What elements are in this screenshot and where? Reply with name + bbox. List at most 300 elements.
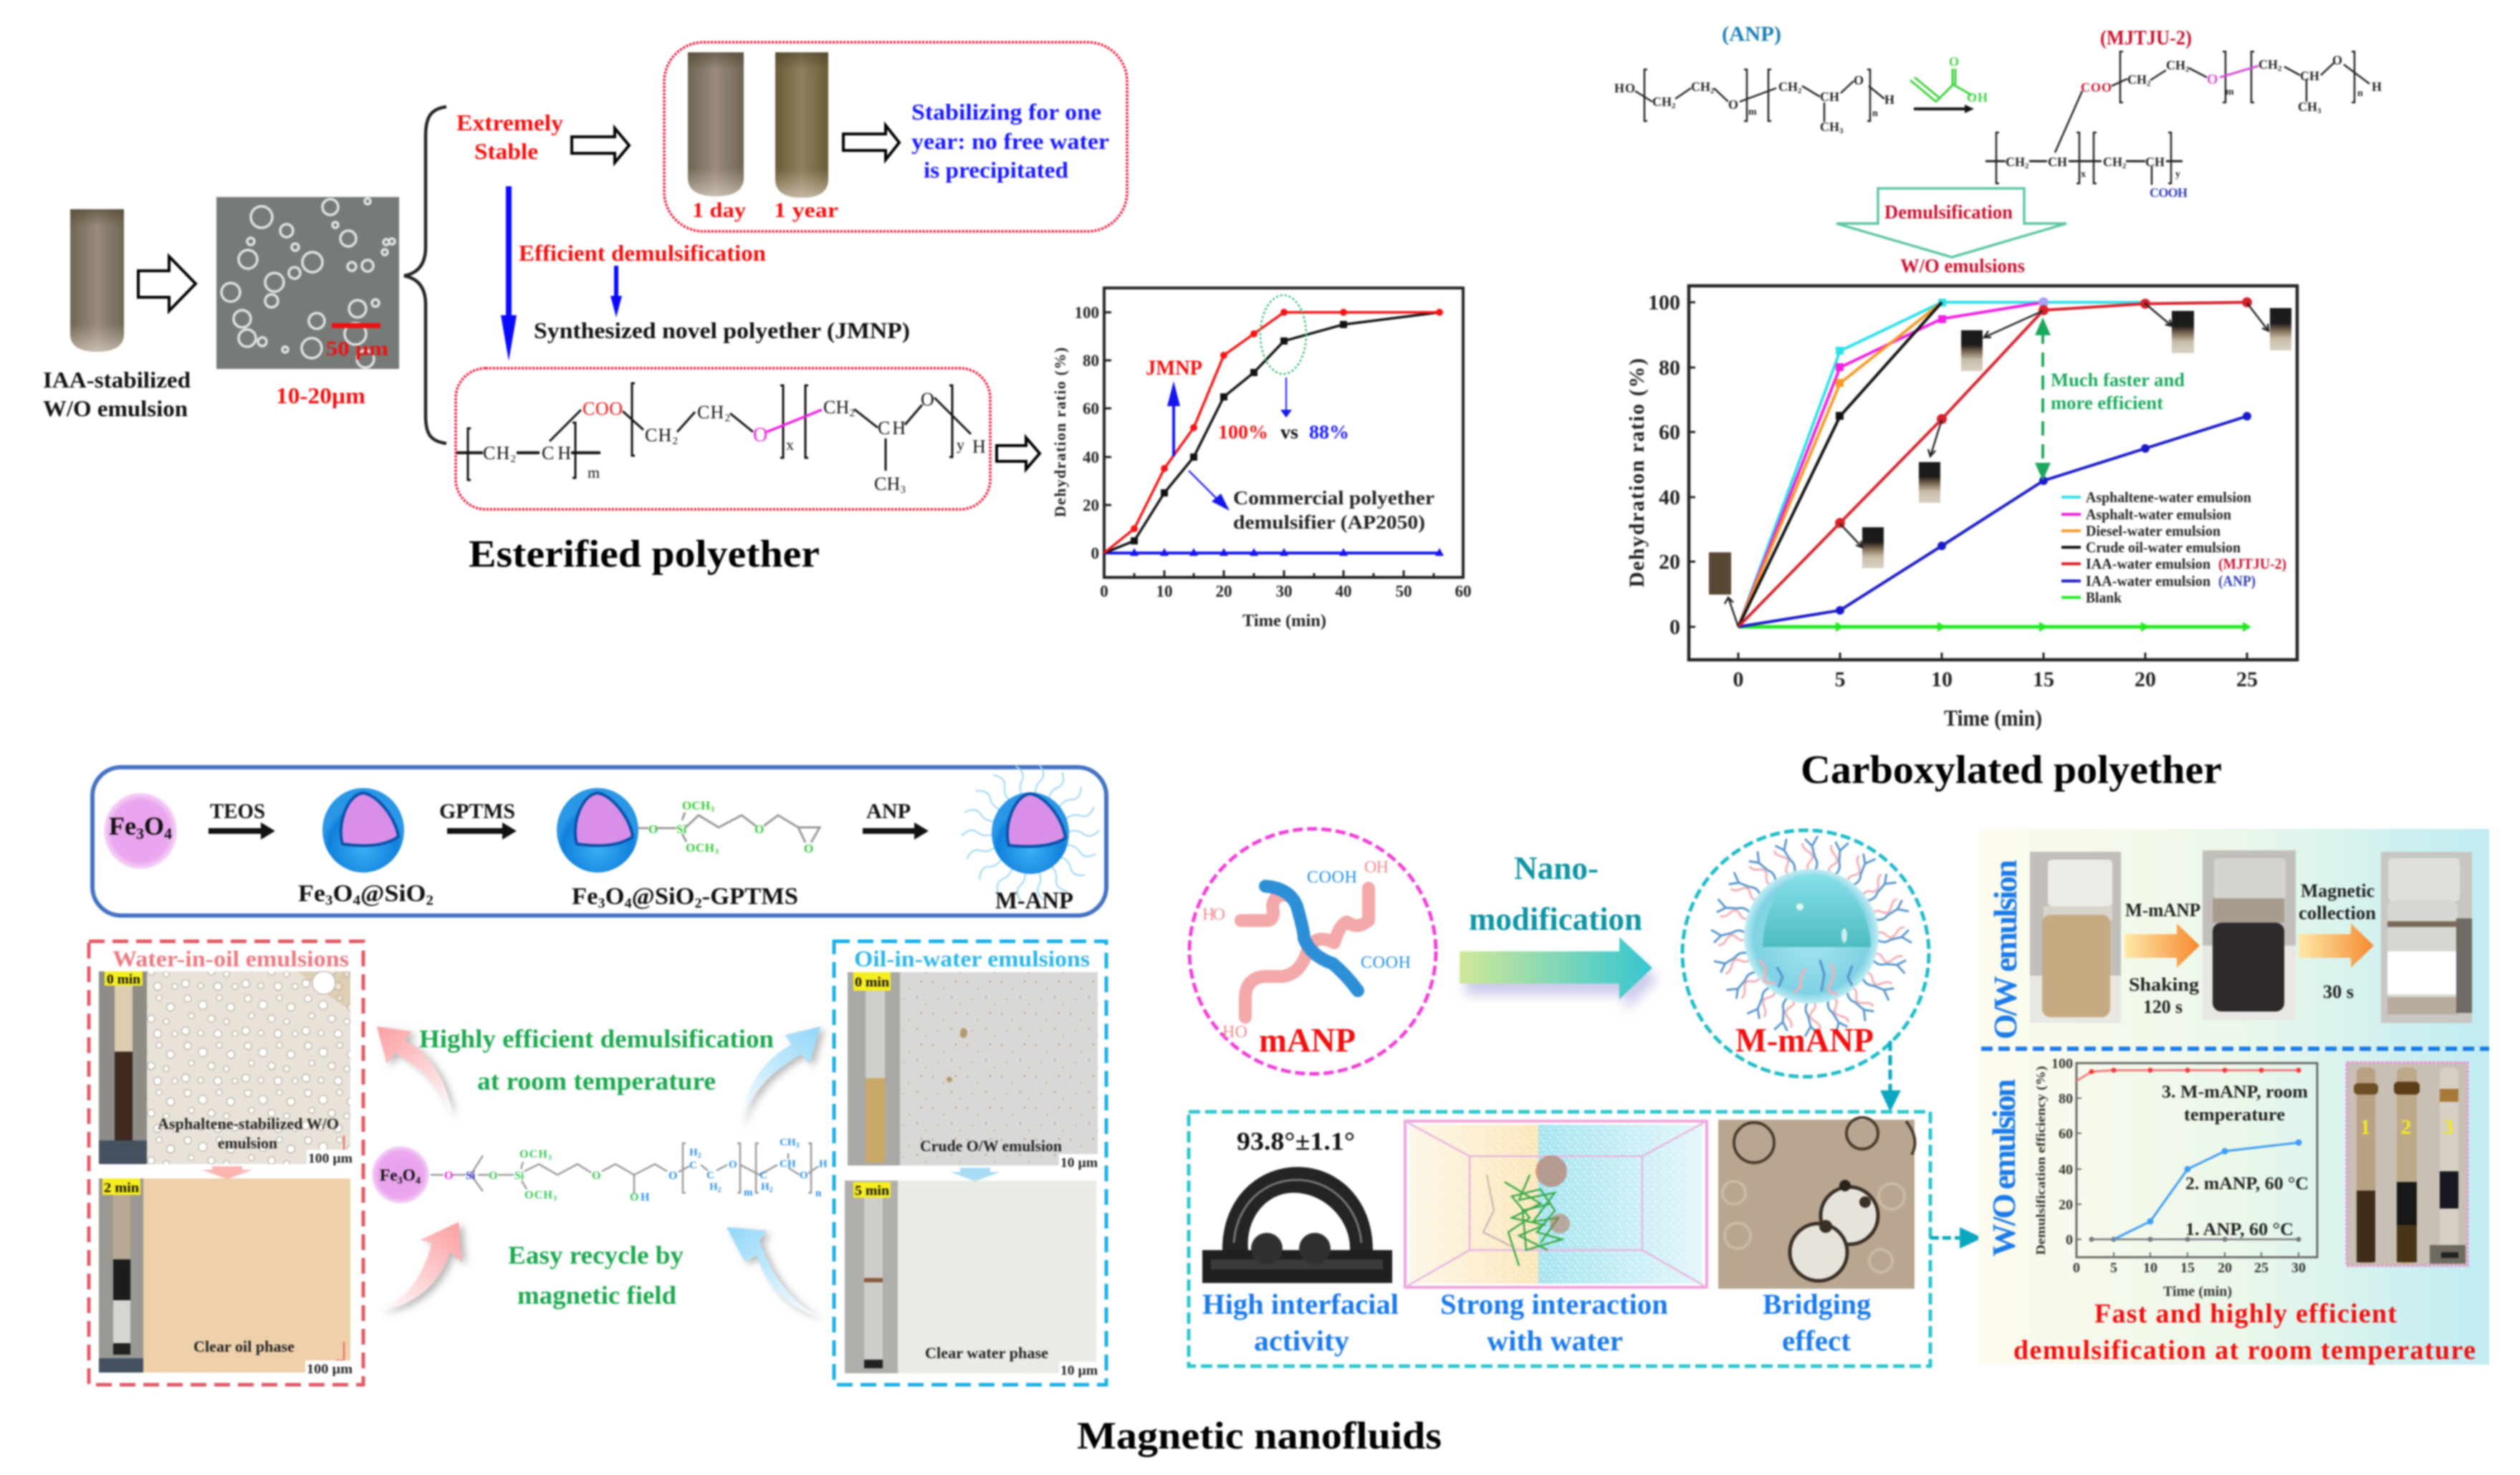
y axis numbers: 40 [1659, 486, 1680, 509]
x axis numbers: 20 [2218, 1260, 2232, 1276]
labels: functional groups: COOH [1361, 953, 1411, 972]
arrow: GPTMS [439, 799, 517, 840]
panel: mANP [1189, 829, 1436, 1074]
heading: carboxylated polyether: Carboxylated polyether [1801, 748, 2222, 792]
label: asphaltene emulsion: Asphaltene-stabilized W/O [158, 1115, 339, 1133]
label: shaking [2129, 974, 2199, 1017]
particle: Fe3O4@SiO2-GPTMS: O [648, 822, 658, 836]
divider: dashed blue [1981, 1047, 2489, 1051]
structure: grafted chain: H [819, 1158, 828, 1170]
structure: grafted chain: O [630, 1191, 638, 1203]
y axis numbers: 80 [1659, 356, 1680, 380]
arrow: to JMNP [1167, 381, 1180, 456]
series: ANP [2089, 1236, 2301, 1242]
label: clear oil phase: Clear oil phase [193, 1337, 294, 1355]
photo: three tubes [2347, 1062, 2468, 1266]
swoosh: pink lower [377, 1222, 462, 1310]
x axis numbers [1100, 582, 1472, 600]
heading: water-in-oil: Water-in-oil emulsions [112, 946, 349, 971]
label: JMNP: JMNP [1146, 356, 1202, 380]
structure: ANP: 2 [1710, 87, 1715, 95]
structure: ANP: m [1748, 107, 1757, 117]
structure: grafted chain: C [689, 1160, 697, 1171]
label: efficient demulsification: Efficient demulsification [519, 240, 766, 266]
structure: grafted chain: Si [466, 1170, 476, 1182]
panel: JMNP structure: x [786, 436, 794, 453]
label: Fe3O4@SiO2-GPTMS: -GPTMS [702, 883, 798, 910]
photo: dark vial [2203, 850, 2296, 1020]
label: 30 s: 30 s [2323, 981, 2354, 1002]
y axis numbers: 20 [1659, 550, 1680, 574]
y axis numbers: 0 [1091, 544, 1099, 562]
panel: stability photos [664, 42, 1127, 231]
y axis numbers: 0 [2066, 1232, 2073, 1248]
y axis numbers: 60 [1083, 400, 1099, 418]
label: Fe3O4@SiO2: 3 [325, 893, 332, 908]
label: crude O/W: Crude O/W emulsion [920, 1137, 1062, 1155]
photo: W/O tube 2 min: 2 min [104, 1181, 139, 1196]
label: magnetic collection: Magnetic [2301, 880, 2375, 901]
photo: IAA emulsion tube [70, 209, 124, 352]
arrow: demulsification [1836, 188, 2066, 257]
x axis numbers: 20 [1215, 582, 1232, 600]
text: highly efficient: at room temperature [477, 1067, 716, 1095]
y axis numbers: 100 [1648, 291, 1680, 314]
photo: 1 year tube [775, 52, 828, 198]
x axis numbers: 30 [2291, 1260, 2306, 1276]
label: Fe3O4@SiO2: 4 [353, 893, 360, 908]
structure: MJTJU-2: CH [2006, 155, 2025, 169]
structure: MJTJU-2: m [2226, 87, 2234, 97]
conclusion: fast and efficient: Fast and highly efficient [2094, 1299, 2397, 1329]
x axis numbers [1733, 668, 2258, 691]
arrow: particle to properties [1880, 1041, 1901, 1112]
panel: JMNP structure: m [588, 463, 600, 481]
label: M-mANP step: M-mANP [2125, 900, 2200, 921]
structure: MJTJU-2: CH [2300, 69, 2319, 83]
series labels: 1. ANP, 60 °C [2185, 1220, 2294, 1239]
chains around particle [1711, 836, 1912, 1037]
series: orange diesel [1738, 302, 1942, 627]
y axis numbers: 100 [1075, 304, 1099, 322]
panel: performance [1978, 829, 2489, 1365]
structure: acrylic acid: O [1949, 54, 1959, 69]
structure: grafted chain [431, 1137, 828, 1203]
labels: 1 day and 1 year [692, 198, 838, 222]
structure: grafted chain: O [592, 1170, 600, 1182]
arrow: faster comparison [2035, 317, 2051, 481]
label: bridging effect: Bridging [1763, 1288, 1871, 1320]
structure: grafted chain: C [706, 1170, 714, 1181]
structure: grafted chain: OCH [519, 1148, 547, 1161]
conclusion: fast and efficient: demulsification at room temperature [2013, 1335, 2476, 1365]
particle: M-ANP [962, 765, 1099, 901]
label: Fe3O4@SiO2: @SiO [360, 880, 426, 907]
panel: central mechanism [372, 1024, 828, 1317]
structure: ANP: CH [1652, 95, 1672, 109]
photo: W/O tube 0 min: 0 min [107, 972, 140, 987]
labels: functional groups [1202, 858, 1411, 1042]
y axis numbers [2051, 1056, 2073, 1248]
structure: grafted chain: O [800, 1170, 808, 1181]
structure: ANP: n [1872, 108, 1878, 119]
legend: (ANP) [2218, 572, 2256, 590]
particle: Fe3O4: 3 [136, 825, 144, 842]
x axis numbers: 50 [1396, 582, 1412, 600]
label: strong interaction [1440, 1288, 1668, 1357]
label: extremely stable [456, 110, 563, 164]
label: asphaltene emulsion: emulsion [218, 1134, 277, 1152]
label: IAA-stabilized W/O emulsion: W/O emulsion [43, 395, 188, 421]
micrograph: emulsion droplets: 50 µm [326, 338, 388, 360]
arrow: photos to note [843, 125, 899, 160]
note: much faster [2051, 370, 2185, 413]
scale: 100 um top: 100 µm [308, 1151, 353, 1166]
x axis title: Time (min) [2163, 1284, 2232, 1299]
y axis numbers [1075, 304, 1099, 562]
note: one-year stability: year: no free water [911, 128, 1109, 154]
chart: JMNP dehydration ratio [1051, 288, 1472, 630]
panel: JMNP structure: CH [542, 443, 571, 463]
y axis numbers [1648, 291, 1680, 639]
label: M-ANP: M-ANP [995, 888, 1073, 914]
photo: O/W tube 0 min: 0 min [855, 975, 889, 990]
panel: JMNP structure: y [957, 436, 964, 453]
x axis numbers: 10 [1931, 668, 1953, 691]
text: highly efficient: Highly efficient demulsification [419, 1024, 774, 1053]
particle: Fe3O4@SiO2-GPTMS: 3 [711, 805, 715, 814]
particle: teal sphere [1744, 869, 1879, 1004]
structure: ANP [1614, 69, 1894, 135]
x axis numbers: 15 [2180, 1260, 2195, 1276]
structure: MJTJU-2: H [2372, 80, 2382, 94]
label: Fe3O4@SiO2-GPTMS: 4 [624, 895, 632, 911]
structure: grafted chain: O [489, 1170, 497, 1182]
chain: pink polymer [1241, 888, 1369, 1017]
x axis numbers: 0 [1733, 668, 1744, 691]
particle: Fe3O4: 4 [164, 825, 172, 842]
structure: ANP: 3 [1839, 127, 1844, 135]
series: M-mANP [2076, 1067, 2301, 1081]
legend: Asphalt-water emulsion [2086, 506, 2231, 523]
label: O/W emulsion: O/W emulsion [1987, 860, 2023, 1039]
label: bridging effect: effect [1782, 1325, 1851, 1357]
label: commercial demulsifier: Commercial polyether [1233, 487, 1434, 509]
label: nano-modification: Nano- [1514, 850, 1599, 886]
x axis numbers: 5 [1834, 668, 1846, 691]
photo: three tubes: 3 [2443, 1115, 2453, 1139]
y axis numbers: 20 [1083, 496, 1099, 514]
label: MJTJU-2: (MJTJU-2) [2100, 27, 2192, 49]
photo: O/W tube 5 min [845, 1181, 898, 1373]
panel: JMNP structure: CH [878, 418, 906, 438]
chain: blue polymer [1265, 886, 1358, 991]
labels: functional groups: HO [1222, 1023, 1247, 1042]
structure: MJTJU-2: O [2332, 53, 2342, 67]
swoosh: blue upper [740, 1027, 820, 1128]
panel: JMNP structure: 2 [510, 453, 516, 465]
structure: ANP: HO [1614, 81, 1635, 95]
inset pointers [1725, 303, 2269, 627]
x axis numbers: 25 [2236, 668, 2258, 691]
structure: grafted chain: CH [780, 1137, 795, 1148]
particle: Fe3O4@SiO2-GPTMS: O [754, 822, 764, 836]
panel: JMNP structure: O [921, 389, 934, 410]
structure: MJTJU-2: 2 [2122, 162, 2127, 170]
chart: MJTJU-2 dehydration ratio [1625, 286, 2297, 731]
value: contact angle: 93.8°±1.1° [1237, 1127, 1355, 1156]
structure: MJTJU-2: CH [2048, 155, 2067, 169]
particle: Fe3O4: Fe [109, 812, 136, 840]
legend: Crude oil-water emulsion [2086, 539, 2241, 556]
panel: JMNP structure [456, 368, 990, 509]
structure: grafted chain: Si [514, 1170, 524, 1182]
x axis numbers: 30 [1275, 582, 1293, 600]
label: W/O emulsions: W/O emulsions [1900, 255, 2025, 277]
structure: MJTJU-2: CH [2103, 155, 2122, 169]
structure: grafted chain: H [689, 1147, 698, 1158]
panel: M-mANP [1682, 830, 1929, 1077]
text: highly efficient [419, 1024, 774, 1095]
label: nano-modification: modification [1469, 900, 1642, 937]
y axis numbers: 40 [2059, 1162, 2073, 1178]
panel: JMNP structure: CH [645, 425, 671, 446]
photo: three tubes: 1 [2360, 1115, 2370, 1139]
arrow: blue down [950, 1168, 1000, 1181]
label: extremely stable: Extremely [456, 110, 563, 135]
y axis numbers: 60 [2059, 1126, 2073, 1142]
arrow: step one [2124, 923, 2200, 968]
arrow: nano modification [1460, 937, 1652, 999]
structure: grafted chain: H [641, 1191, 650, 1203]
comparison text: 88% [1309, 421, 1349, 443]
photo: three tubes: 2 [2400, 1115, 2412, 1139]
series: JMNP [1104, 309, 1443, 553]
label: mANP: mANP [1259, 1022, 1356, 1060]
arrow: TEOS: TEOS [210, 799, 265, 823]
label: bridging effect [1763, 1288, 1871, 1357]
structure: ANP: H [1884, 92, 1894, 107]
x axis numbers: 10 [2143, 1260, 2157, 1276]
structure: MJTJU-2: 2 [2278, 64, 2282, 73]
y axis numbers: 100 [2051, 1056, 2073, 1072]
panel: JMNP structure: CH [874, 474, 900, 494]
photo: O/W tube 0 min [848, 972, 900, 1166]
arrow: GPTMS: GPTMS [439, 799, 515, 823]
heading: magnetic nanofluids: Magnetic nanofluids [1077, 1414, 1442, 1457]
scale: 10 um top: 10 µm [1060, 1156, 1098, 1171]
structure: MJTJU-2: x [2081, 169, 2086, 180]
structure: MJTJU-2: CH [2145, 155, 2165, 169]
scale: 100 um bottom [305, 1342, 354, 1377]
y axis numbers: 40 [1083, 448, 1099, 466]
x axis numbers: 25 [2254, 1260, 2269, 1276]
scale: 100 um bottom: 100 µm [307, 1362, 353, 1377]
particle: Fe3O4@SiO2-GPTMS: Si [676, 822, 686, 836]
particle: modified Fe3O4: Fe [380, 1166, 397, 1184]
comparison text: vs [1280, 421, 1298, 443]
y axis numbers: 80 [1083, 352, 1099, 370]
labels: 1 day and 1 year: 1 day [692, 198, 746, 222]
chart: demulsification efficiency [2033, 1056, 2317, 1299]
particle: Fe3O4@SiO2-GPTMS: 3 [715, 847, 719, 856]
structure: acrylic acid [1910, 54, 1988, 105]
label: nano-modification [1469, 850, 1642, 937]
x axis numbers: 5 [2110, 1260, 2117, 1276]
panel: JMNP structure: 3 [900, 484, 906, 496]
series labels: temperature [2184, 1105, 2285, 1125]
label: synthesized polyether: Synthesized novel polyether (JMNP) [534, 317, 910, 343]
label: Fe3O4@SiO2: Fe [298, 880, 324, 907]
structure: MJTJU-2: CH [2298, 100, 2317, 114]
y axis title: Demulsification efficiency (%) [2033, 1066, 2049, 1255]
panel: JMNP structure: H [972, 436, 986, 457]
y axis numbers: 0 [1669, 615, 1680, 639]
panel: esterified polyether [43, 42, 1127, 575]
structure: grafted chain: 2 [770, 1186, 773, 1194]
structure: ANP: 2 [1798, 87, 1802, 95]
structure: ANP: CH [1820, 90, 1839, 104]
label: high interfacial activity: activity [1254, 1325, 1349, 1357]
highlight ellipse [1260, 295, 1306, 374]
swoosh: blue lower [727, 1227, 819, 1317]
particle: modified Fe3O4 [372, 1146, 429, 1203]
arrow: long blue [501, 186, 517, 361]
label: asphaltene emulsion [158, 1115, 339, 1152]
structure: MJTJU-2: CH [2258, 57, 2278, 72]
structure: ANP: O [1854, 73, 1864, 87]
arrow: to commercial [1189, 471, 1222, 504]
x axis numbers: 40 [1336, 582, 1351, 600]
micrograph: W/O droplets [147, 971, 350, 1164]
particle: Fe3O4@SiO2-GPTMS: O [804, 842, 813, 855]
series labels [2162, 1082, 2309, 1239]
label: commercial demulsifier: demulsifier (AP2050) [1233, 511, 1425, 533]
structure: MJTJU-2: 2 [2025, 162, 2029, 170]
series: mANP [2114, 1139, 2301, 1239]
panel: M-ANP synthesis [92, 765, 1106, 916]
label: droplet size: 10-20µm [276, 383, 365, 408]
panel: properties [1189, 1112, 1930, 1366]
structure: grafted chain: H [709, 1181, 718, 1193]
label: strong interaction: Strong interaction [1440, 1288, 1668, 1320]
series labels: 2. mANP, 60 °C [2185, 1174, 2309, 1193]
y axis title: Dehydration ratio (%) [1625, 358, 1649, 587]
text: easy recycle: magnetic field [517, 1281, 676, 1310]
swoosh: pink upper [377, 1027, 452, 1116]
label: IAA-stabilized W/O emulsion [43, 367, 191, 421]
label: Fe3O4@SiO2-GPTMS: Fe [572, 883, 598, 910]
panel: JMNP structure: 2 [672, 436, 678, 447]
particle: modified Fe3O4: O [403, 1166, 416, 1184]
photo: droplet [1202, 1166, 1392, 1283]
arrow: structure to chart [997, 438, 1040, 469]
note: one-year stability [911, 99, 1109, 183]
structure: MJTJU-2: 3 [2317, 107, 2322, 115]
note: one-year stability: Stabilizing for one [911, 99, 1101, 125]
label: magnetic collection [2299, 880, 2377, 923]
text: easy recycle [508, 1241, 684, 1310]
heading: esterified polyether: Esterified polyether [469, 532, 820, 575]
particle: Fe3O4 [104, 793, 177, 869]
photo: W/O tube 0 min [99, 971, 147, 1164]
legend: Asphaltene-water emulsion [2086, 489, 2251, 506]
structure: ANP: 2 [1672, 102, 1676, 110]
structure: acrylic acid: OH [1967, 90, 1988, 105]
comparison text: 100% [1218, 421, 1268, 443]
labels: functional groups: HO [1202, 905, 1225, 924]
structure: grafted chain: m [744, 1187, 753, 1198]
series labels: 3. M-mANP, room [2162, 1082, 2308, 1102]
label: Fe3O4@SiO2: 2 [426, 893, 433, 908]
label: Fe3O4@SiO2: O [332, 880, 353, 907]
structure: ANP: CH [1820, 120, 1839, 134]
conclusion: fast and efficient [2013, 1299, 2476, 1365]
legend: Blank [2086, 589, 2122, 606]
structure: grafted chain: O [729, 1159, 737, 1171]
arrow: ANP: ANP [866, 799, 911, 823]
structure: grafted chain: 2 [718, 1186, 722, 1194]
scale: 100 um top [307, 1135, 354, 1166]
simulation box [1405, 1121, 1707, 1287]
structure: ANP: CH [1778, 80, 1798, 94]
x axis title: Time (min) [1242, 612, 1326, 630]
y axis numbers: 80 [2059, 1091, 2073, 1107]
label: W/O emulsion: W/O emulsion [1985, 1079, 2022, 1257]
label: IAA-stabilized W/O emulsion: IAA-stabilized [43, 367, 191, 393]
arrow: short blue [610, 266, 622, 317]
label: M-mANP: M-mANP [1735, 1022, 1874, 1060]
x axis numbers: 20 [2135, 668, 2156, 691]
comparison text [1218, 421, 1349, 443]
y axis numbers: 60 [1659, 421, 1680, 444]
panel: JMNP structure: COO [583, 398, 623, 419]
legend [2061, 489, 2286, 606]
structure: MJTJU-2 [1985, 52, 2382, 200]
series: black crude [1738, 302, 1942, 627]
labels: 1 day and 1 year: 1 year [774, 198, 838, 222]
arrow: ANP [863, 799, 929, 840]
particle: Fe3O4@SiO2-GPTMS: OCH [686, 841, 714, 855]
label: Fe3O4@SiO2-GPTMS: O [605, 883, 624, 910]
label: clear water phase: Clear water phase [925, 1344, 1048, 1362]
panel: JMNP structure: O [753, 424, 767, 446]
legend: IAA-water emulsion [2086, 572, 2210, 590]
structure: MJTJU-2: COO [2081, 80, 2112, 95]
label: Fe3O4@SiO2-GPTMS: 2 [694, 895, 702, 911]
structure: MJTJU-2: O [2207, 72, 2218, 87]
brace [404, 107, 446, 443]
structure: grafted chain: C [760, 1170, 767, 1181]
series: blank line [1104, 548, 1444, 556]
photo: clear vial [2381, 852, 2472, 1023]
label: commercial demulsifier [1233, 487, 1434, 533]
structure: grafted chain: H [761, 1181, 770, 1193]
structure: MJTJU-2: COOH [2150, 186, 2188, 200]
arrow: pink down [202, 1166, 252, 1179]
structure: grafted chain: n [815, 1188, 822, 1199]
structure: MJTJU-2: n [2357, 88, 2363, 99]
structure: grafted chain: 3 [548, 1154, 552, 1162]
micrograph: clear oil [143, 1178, 350, 1373]
label: extremely stable: Stable [474, 138, 538, 164]
x axis numbers: 10 [1156, 582, 1172, 600]
photo: O/W tube 5 min: 5 min [855, 1183, 889, 1198]
panel: JMNP structure: 2 [725, 413, 730, 424]
x axis numbers [2073, 1260, 2306, 1276]
structure: grafted chain: O [444, 1170, 453, 1182]
panel: JMNP structure: 2 [850, 408, 855, 419]
